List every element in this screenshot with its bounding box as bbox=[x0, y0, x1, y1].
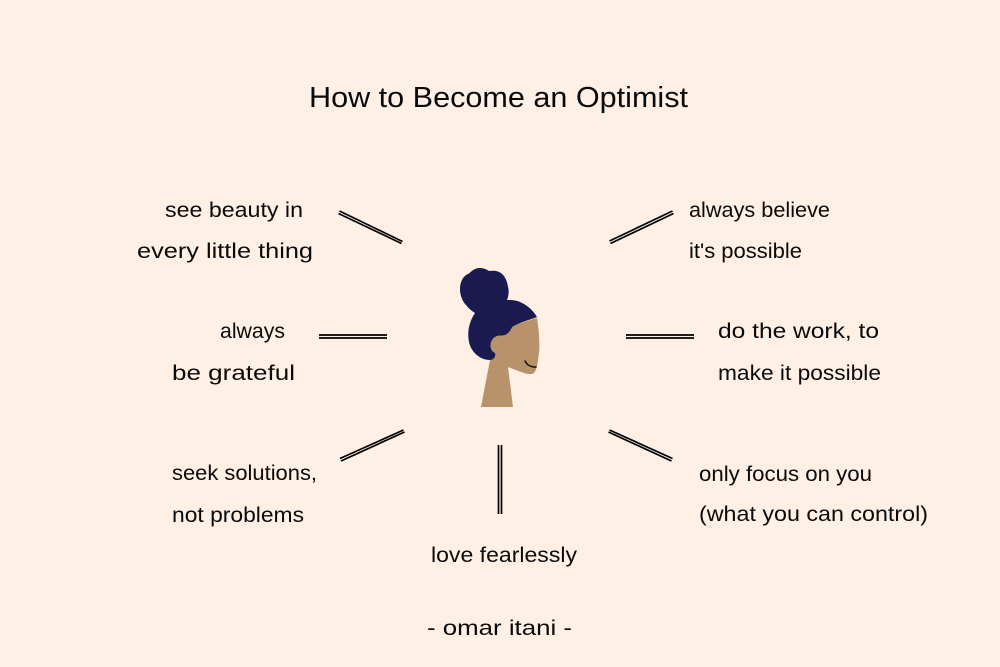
smile bbox=[525, 361, 536, 367]
ray: middle left bbox=[319, 335, 387, 338]
ray: bottom bbox=[498, 445, 502, 514]
ray: top left bbox=[338, 211, 402, 244]
text: do the work, to make it possible: do the work, to bbox=[718, 320, 879, 343]
text: do the work, to make it possible bbox=[718, 320, 881, 385]
text: only focus on you (what you can control) bbox=[699, 463, 928, 526]
ray: top right bbox=[610, 211, 674, 244]
hair bbox=[460, 268, 537, 360]
text: only focus on you (what you can control): (what you can control) bbox=[699, 503, 928, 526]
text: always believe it's possible: always believe bbox=[689, 199, 830, 222]
text: seek solutions, not problems bbox=[172, 462, 317, 527]
neck and face bbox=[481, 318, 539, 407]
ray: bottom left bbox=[340, 430, 404, 461]
ray: bottom right bbox=[608, 430, 672, 461]
text: always be grateful: be grateful bbox=[172, 362, 295, 385]
ray: middle right bbox=[626, 335, 694, 338]
text: always be grateful bbox=[172, 320, 295, 385]
text: only focus on you (what you can control): only focus on you bbox=[699, 463, 872, 486]
title: How to Become an Optimist bbox=[309, 82, 688, 114]
text: seek solutions, not problems: not problems bbox=[172, 504, 304, 527]
text: always believe it's possible bbox=[689, 199, 830, 263]
text: see beauty in every little thing bbox=[137, 199, 313, 263]
illustration: woman in profile with hair bun bbox=[460, 268, 539, 407]
text: seek solutions, not problems: seek solutions, bbox=[172, 462, 317, 485]
text: always be grateful: always bbox=[220, 320, 285, 343]
ear bbox=[490, 336, 510, 354]
text: love fearlessly: love fearlessly bbox=[431, 544, 578, 567]
text: see beauty in every little thing: see beauty in bbox=[165, 199, 303, 222]
signature: - omar itani - bbox=[427, 617, 572, 640]
text: do the work, to make it possible: make it possible bbox=[718, 362, 881, 385]
text: see beauty in every little thing: every little thing bbox=[137, 240, 313, 263]
text: always believe it's possible: it's possible bbox=[689, 240, 802, 263]
